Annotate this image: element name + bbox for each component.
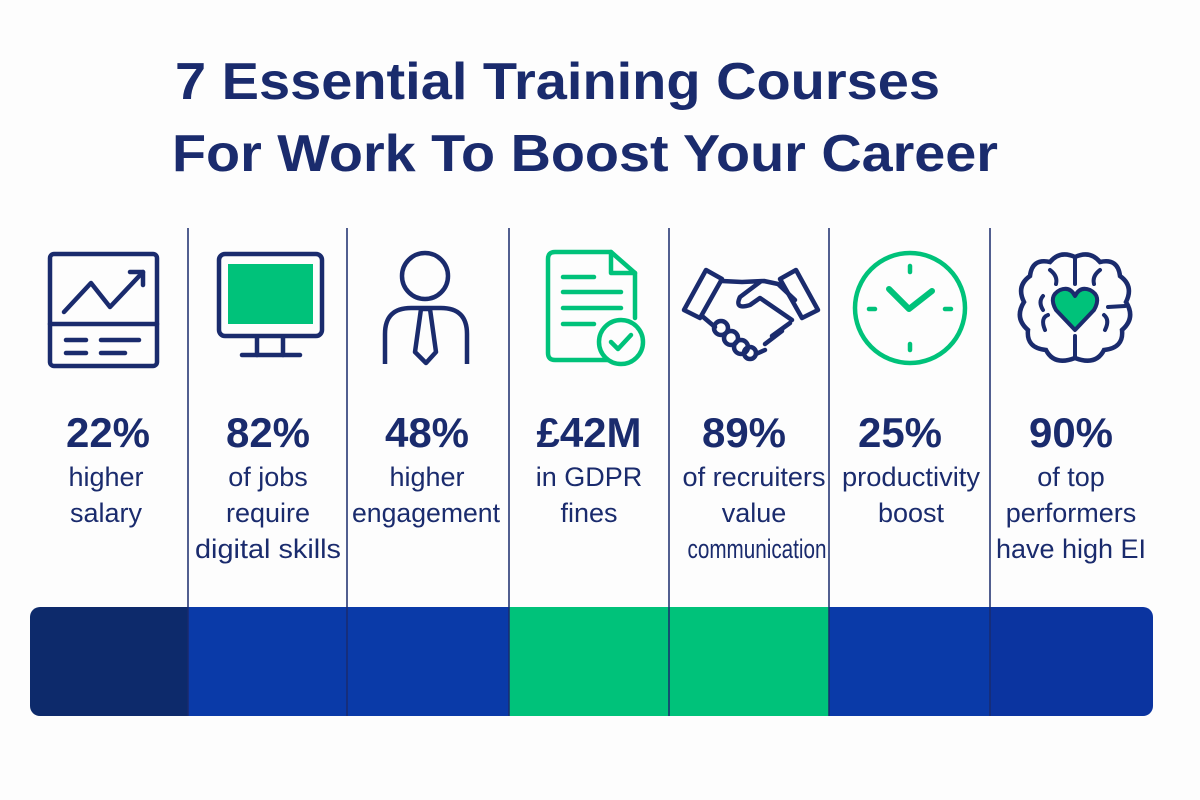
icon: handshake [684, 270, 818, 359]
title: For Work To Boost Your Career [172, 125, 998, 183]
icon: brain with heart [1020, 254, 1130, 361]
stat 3: higher [389, 462, 465, 492]
icon: clock [855, 253, 965, 363]
stat 3: engagement [352, 498, 500, 528]
stat 6: 25% [858, 409, 942, 456]
color bar [30, 607, 1153, 716]
stat 2: of jobs [228, 462, 308, 492]
stat 4 [536, 409, 642, 528]
stat 1: higher [68, 462, 144, 492]
stat 7: 90% [1029, 409, 1113, 456]
stat 6: boost [878, 498, 945, 528]
icon: person [385, 253, 467, 364]
stat 6: productivity [842, 462, 980, 492]
stat 1: salary [70, 498, 143, 528]
icon: monitor [219, 254, 322, 355]
icon: GDPR document [548, 252, 643, 364]
stat 7: have high EI [996, 534, 1146, 564]
stat 5: 89% [702, 409, 786, 456]
title [172, 53, 998, 183]
stat 4: £42M [536, 409, 642, 456]
stat 2 [195, 409, 341, 564]
title: 7 Essential Training Courses [175, 53, 940, 111]
stat 5: communication [688, 534, 826, 564]
stat 7: of top [1037, 462, 1105, 492]
stat 2: 82% [226, 409, 310, 456]
stat 5: value [722, 498, 786, 528]
stat 3 [352, 409, 500, 528]
stat 4: in GDPR [536, 462, 642, 492]
stat 1 [66, 409, 150, 528]
stat 7: performers [1006, 498, 1136, 528]
stat 2: digital skills [195, 534, 341, 564]
stat 6 [842, 409, 980, 528]
stat 1: 22% [66, 409, 150, 456]
icon: salary chart [50, 254, 157, 366]
stat 4: fines [560, 498, 618, 528]
stat 5 [682, 409, 826, 564]
stat 3: 48% [385, 409, 469, 456]
stat 7 [996, 409, 1146, 564]
stat 5: of recruiters [682, 462, 826, 492]
stats text [66, 409, 1146, 564]
stat 2: require [226, 498, 310, 528]
